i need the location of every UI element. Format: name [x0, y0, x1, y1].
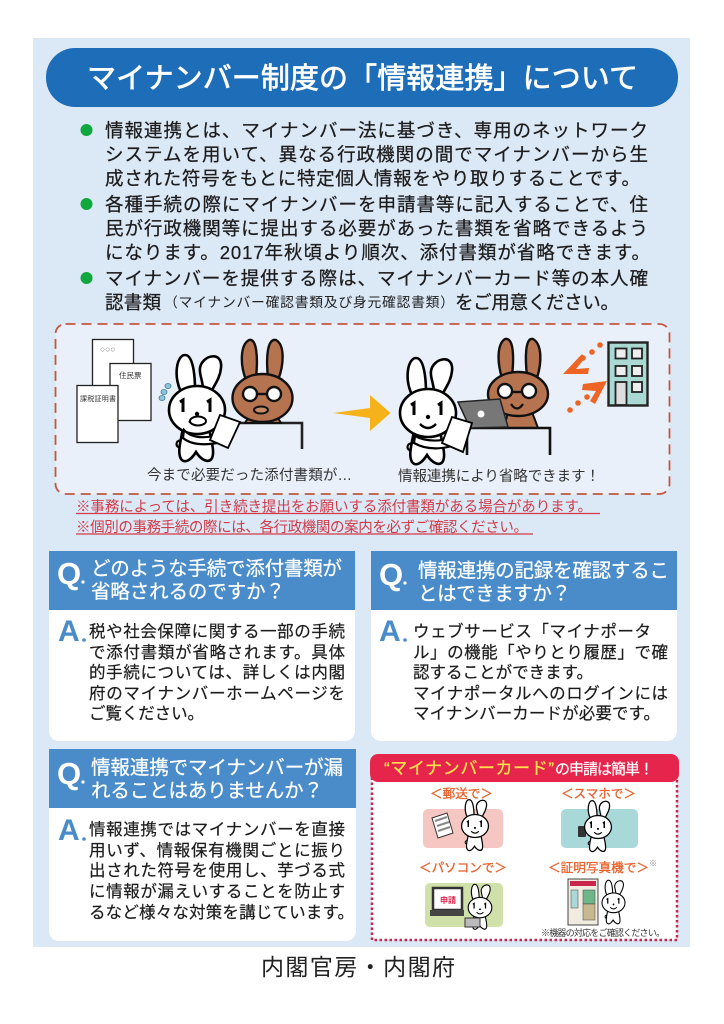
bullet 3: マイナンバーを提供する際は、マイナンバーカード等の本人確 — [105, 268, 648, 289]
panel: My Number card application — [370, 754, 679, 940]
bullet 1: 情報連携とは、マイナンバー法に基づき、専用のネットワーク — [105, 120, 648, 141]
Q1 answer: 税や社会保障に関する一部の手続 — [89, 622, 346, 641]
Q1 header: 省略されるのですか？ — [91, 581, 285, 603]
red notes: ※個別の事務手続の際には、各行政機関の案内を必ずご確認ください。 — [76, 519, 528, 536]
footnote: ※機器の対応をご確認ください。 — [541, 927, 665, 938]
Q2 header: 情報連携の記録を確認するこ — [418, 560, 669, 582]
bullet 2: 各種手続の際にマイナンバーを申請書等に記入することで、住 — [105, 194, 648, 215]
Q2 answer: ウェブサービス「マイナポータ — [413, 621, 651, 641]
Q2 answer: 認することができます。 — [413, 663, 593, 682]
Q2 answer: マイナンバーカードが必要です。 — [413, 704, 660, 723]
Q3 header — [49, 749, 356, 808]
bullet list — [80, 120, 650, 313]
Q1 answer: 的手続については、詳しくは内閣 — [89, 663, 345, 682]
icon: happy rabbit holding paper — [400, 358, 472, 464]
icon: stack of documents: 住民票 — [119, 370, 142, 380]
bullet 1: システムを用いて、異なる行政機関の間でマイナンバーから生 — [105, 144, 648, 165]
bullet 2: 民が行政機関等に提出する必要があった書類を省略できるよう — [105, 218, 648, 239]
Q3 answer: 情報連携ではマイナンバーを直接 — [89, 820, 345, 839]
bullet 3: （マイナンバー確認書類及び身元確認書類） — [164, 295, 454, 310]
Q1 answer: で添付書類が省略されます。具体 — [89, 643, 346, 662]
icon: stack of documents — [77, 340, 151, 442]
icon: stack of documents: 課税証明書 — [80, 394, 116, 403]
panel: Q2 — [371, 551, 677, 741]
Q1 header: どのような手続で添付書類が — [91, 558, 342, 580]
icon: white rabbit holding paper — [169, 355, 240, 461]
Q2 header — [371, 551, 677, 610]
title banner: マイナンバー制度の「情報連携」について — [87, 62, 638, 95]
method: PC: ＜パソコンで＞ — [419, 861, 507, 875]
Q1 answer: 府のマイナンバーホームページを — [89, 684, 345, 703]
Q2 header: とはできますか？ — [418, 583, 571, 605]
icon: desk, right clerk with laptop — [458, 339, 550, 455]
footer: issuing organizations: 内閣官房・内閣府 — [261, 954, 455, 980]
icon: sweat drops — [159, 384, 171, 400]
bullet 1 — [80, 120, 648, 189]
bullet 3: 認書類 — [105, 292, 161, 313]
bullet 3 — [80, 268, 648, 313]
Q3 answer: 出された符号を使用し、芋づる式 — [89, 861, 345, 880]
Q1 header: Q — [57, 556, 81, 591]
icon: stack of documents: ○○○ — [100, 344, 115, 354]
method: photo booth — [548, 859, 657, 925]
Q3 answer: 用いず、情報保有機関ごとに振り — [89, 841, 345, 860]
method: smartphone — [561, 787, 638, 852]
Q3 header: 情報連携でマイナンバーが漏 — [91, 757, 343, 779]
Q3 header: Q — [57, 756, 81, 791]
Q3 answer: A — [58, 814, 80, 847]
Q3 answer: に情報が漏えいすることを防止す — [89, 882, 345, 901]
method: PC — [419, 861, 507, 929]
Q2 header: Q — [379, 557, 403, 592]
method: PC: 申請 — [440, 895, 456, 905]
Q2 answer: ル」の機能「やりとり履歴」で確 — [413, 643, 668, 662]
arrow: orange — [333, 395, 390, 431]
Q2 answer: A — [379, 615, 401, 648]
method: smartphone: ＜スマホで＞ — [561, 787, 636, 801]
Q1 header — [49, 551, 355, 610]
bullet 2 — [80, 194, 650, 263]
Q3 answer — [58, 814, 354, 922]
Q1 answer: ご覧ください。 — [89, 704, 204, 723]
panel: illustration of document omission — [56, 324, 670, 494]
caption: before: 今まで必要だった添付書類が… — [147, 467, 352, 484]
caption: after: 情報連携により省略できます！ — [398, 468, 600, 485]
red notes — [76, 498, 600, 536]
Q1 answer — [58, 615, 346, 723]
icon: orange data exchange arrows — [563, 342, 607, 413]
Q2 answer — [379, 615, 668, 723]
panel: Q1 — [49, 551, 355, 741]
bullet 3: をご用意ください。 — [455, 292, 619, 313]
bullet 1: 成された符号をもとに特定個人情報をやり取りすることです。 — [105, 168, 640, 189]
method: photo booth: ＜証明写真機で＞ — [548, 861, 649, 875]
card header: “マイナンバーカード” — [384, 759, 554, 778]
method: mail — [423, 787, 503, 851]
method: mail: ＜郵送で＞ — [430, 787, 493, 801]
icon: government building — [608, 342, 648, 406]
method: photo booth: ※ — [649, 859, 657, 868]
Q3 header: れることはありませんか？ — [91, 780, 323, 802]
icon: desk, left clerk — [222, 340, 302, 449]
panel: Q3 — [49, 749, 356, 941]
card header: の申請は簡単！ — [555, 760, 654, 778]
Q3 answer: るなど様々な対策を講じています。 — [89, 903, 354, 922]
red notes: ※事務によっては、引き続き提出をお願いする添付書類がある場合があります。 — [76, 498, 592, 516]
card header — [370, 754, 679, 782]
Q2 answer: マイナポータルへのログインには — [413, 684, 668, 703]
bullet 2: になります。2017年秋頃より順次、添付書類が省略できます。 — [105, 242, 650, 263]
Q1 answer: A — [58, 615, 80, 648]
title banner — [46, 48, 678, 107]
